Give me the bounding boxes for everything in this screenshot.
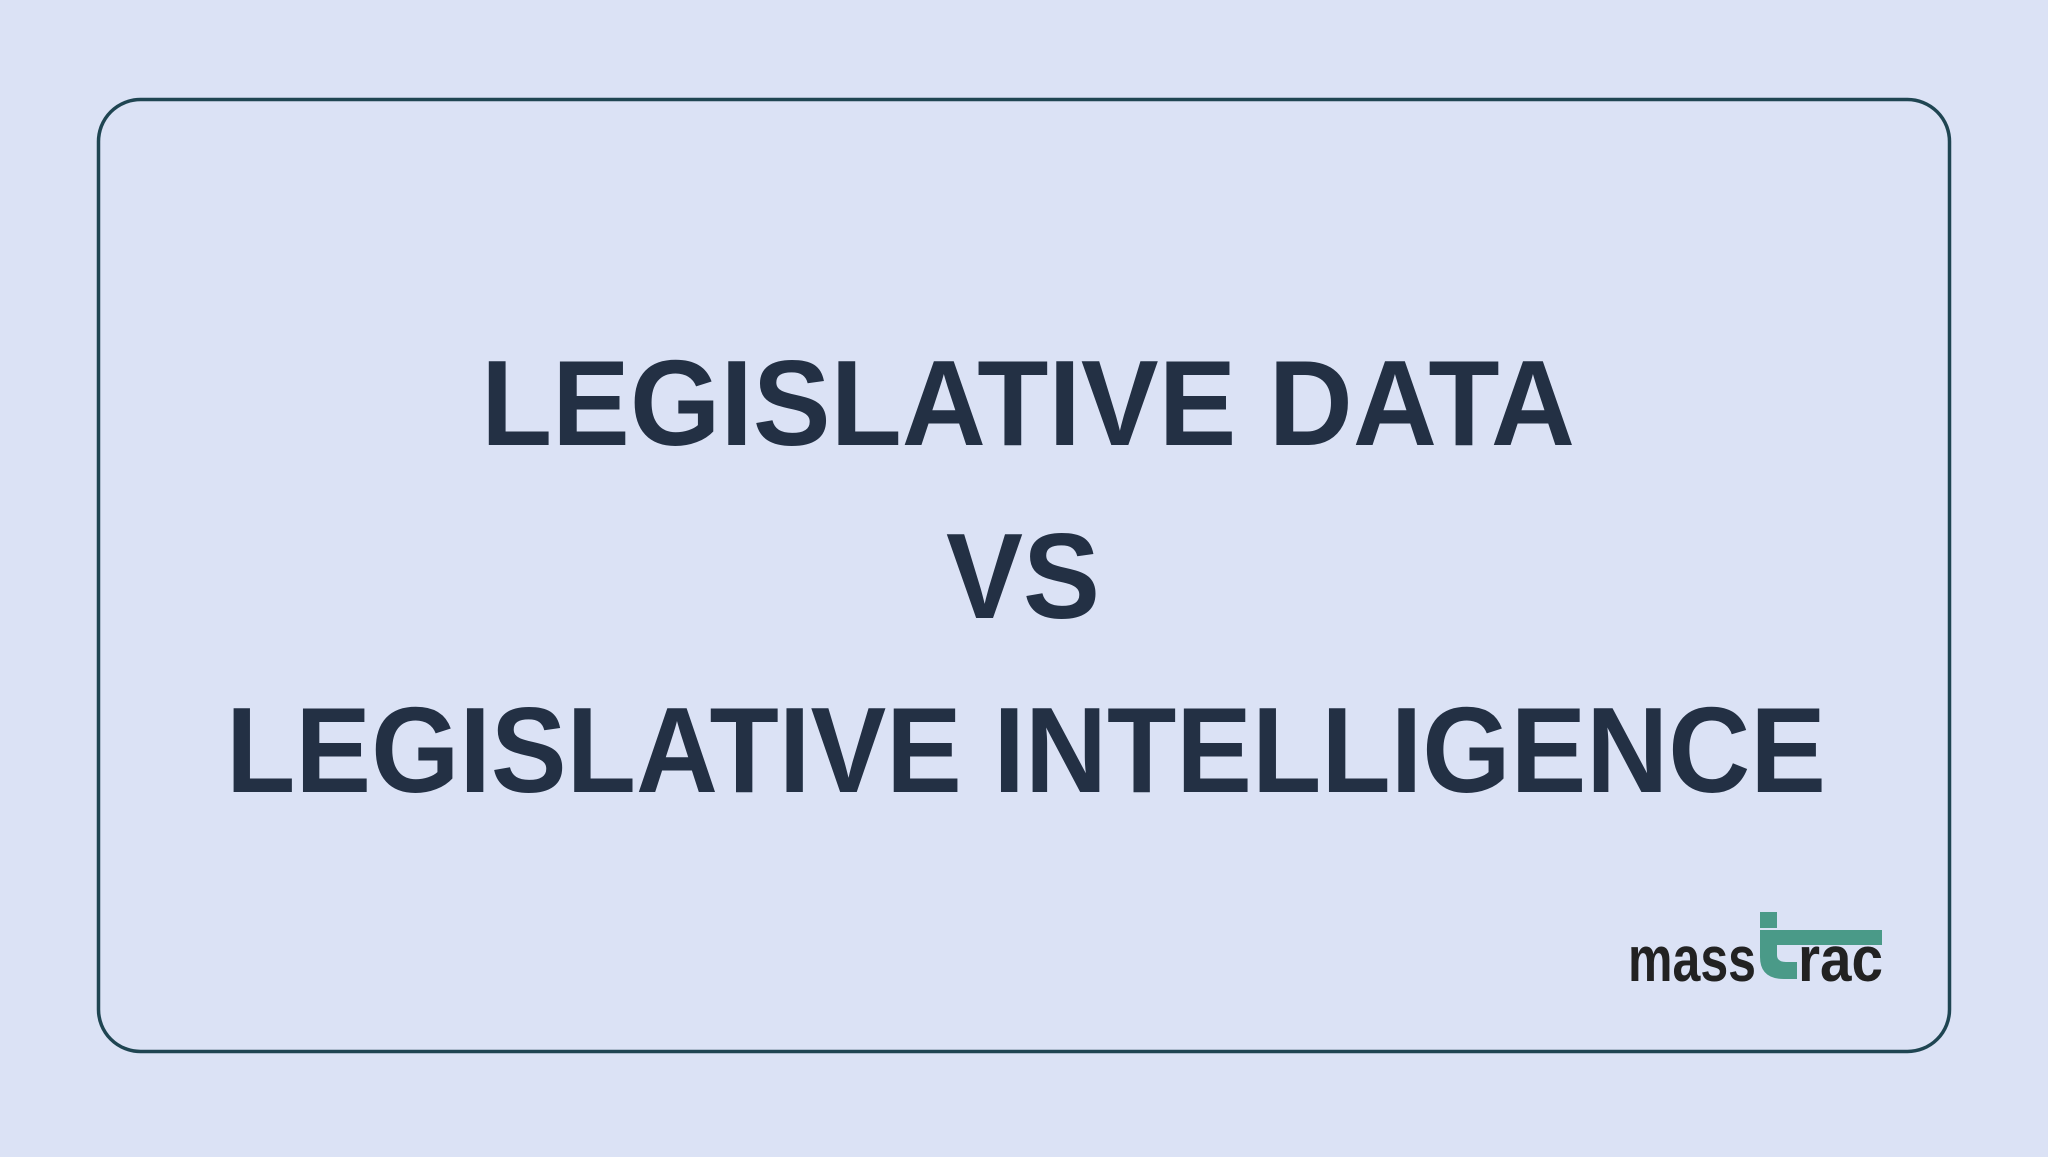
title line 1: LEGISLATIVE DATA <box>481 335 1575 471</box>
logo text: rac <box>1798 923 1883 995</box>
logo mark: green t <box>1760 912 1882 979</box>
panel: rounded frame <box>98 100 1950 1052</box>
title line 3: LEGISLATIVE INTELLIGENCE <box>226 682 1826 818</box>
title line 2: VS <box>946 508 1100 644</box>
logo: masstrac <box>1628 912 1883 995</box>
title: heading text <box>226 335 1826 818</box>
logo text <box>1628 923 1883 995</box>
logo text: mass <box>1628 923 1756 995</box>
